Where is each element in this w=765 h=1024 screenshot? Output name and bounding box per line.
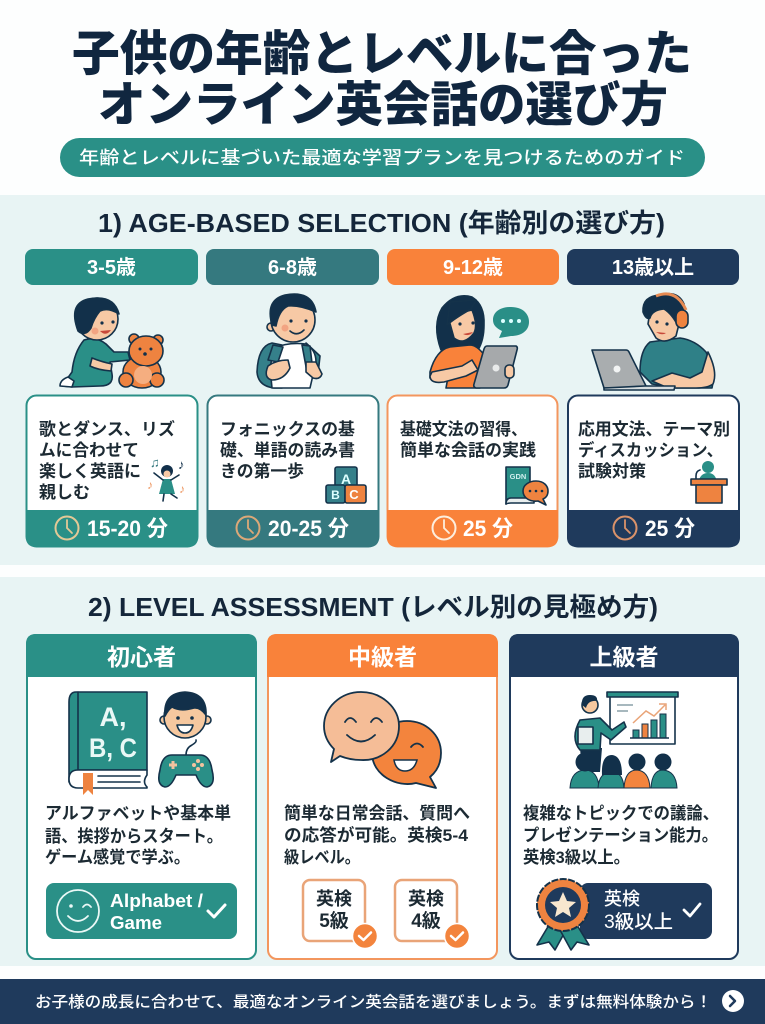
card text bbox=[578, 420, 730, 481]
subtitle pill bbox=[60, 138, 705, 177]
badge: Eiken grade 5: 5級 bbox=[319, 910, 349, 932]
level description: 英検3級以上。 bbox=[523, 847, 630, 867]
icon: ABC book bbox=[69, 692, 147, 795]
heading: level assessment: 2) LEVEL ASSESSMENT (レベル別の見極め方) bbox=[88, 592, 658, 622]
icon: dancing child: ♪ bbox=[147, 478, 153, 492]
icon: alphabet blocks: B bbox=[331, 488, 340, 502]
badge: alphabet / game bbox=[46, 883, 237, 939]
icon: dancing child: ♪ bbox=[179, 482, 185, 496]
icon: dancing child: ♫ bbox=[150, 455, 160, 470]
duration: 25 min: 25 分 bbox=[463, 516, 513, 541]
level description: ゲーム感覚で学ぶ。 bbox=[45, 847, 190, 867]
icon: book and chat: GDN bbox=[510, 472, 526, 481]
card: 9-12 years bbox=[387, 396, 558, 547]
badge: Eiken grade 3 and above: 3級以上 bbox=[604, 911, 673, 933]
card text bbox=[400, 420, 536, 460]
level title: 初心者 bbox=[107, 644, 176, 670]
tab: 13 and up bbox=[567, 249, 739, 285]
badge: Eiken grade 3 and above: 英検 bbox=[604, 889, 640, 909]
duration: 25 min bbox=[614, 516, 695, 541]
icon: smiling speech bubbles bbox=[324, 692, 441, 788]
icon: dancing child: ♪ bbox=[178, 457, 184, 472]
duration: 20-25 min bbox=[236, 516, 349, 541]
icon: alphabet blocks: A bbox=[341, 471, 351, 487]
card: 13 and up bbox=[567, 396, 740, 547]
icon: arrow button bbox=[722, 990, 744, 1012]
badge: Eiken grade 4 bbox=[395, 880, 470, 948]
duration: 25 min: 25 分 bbox=[645, 516, 695, 541]
badge: Eiken grade 3 and above bbox=[537, 879, 712, 950]
badge: Eiken grade 4: 英検 bbox=[408, 888, 444, 909]
icon: game controller bbox=[159, 740, 213, 787]
badge: Eiken grade 5 bbox=[303, 880, 378, 948]
level description: の応答が可能。英検5-4 bbox=[284, 825, 469, 845]
badge: Eiken grade 5: 英検 bbox=[316, 888, 352, 909]
panel: age-based selection bbox=[0, 195, 765, 565]
title: オンライン英会話の選び方 bbox=[98, 79, 668, 132]
title bbox=[72, 28, 692, 132]
tab: 3-5 years bbox=[25, 249, 198, 285]
card text: ムに合わせて bbox=[39, 441, 139, 460]
card: advanced bbox=[509, 634, 739, 959]
tab: 6-8 years bbox=[206, 249, 379, 285]
card text: 基礎文法の習得、 bbox=[400, 420, 527, 439]
level description: プレゼンテーション能力。 bbox=[523, 825, 718, 845]
badge: alphabet / game: Game bbox=[110, 913, 162, 933]
card: 6-8 years bbox=[207, 396, 379, 547]
level title: 上級者 bbox=[590, 644, 658, 670]
card text: ディスカッション、 bbox=[578, 440, 723, 460]
tab: 9-12 years: 9-12歳 bbox=[443, 256, 503, 279]
icon: alphabet blocks bbox=[326, 467, 366, 503]
icon: presenter with chart and audience bbox=[570, 692, 678, 788]
level description bbox=[523, 803, 719, 867]
level description: 語、挨拶からスタート。 bbox=[45, 826, 223, 846]
icon: teen with headphones and laptop bbox=[592, 294, 715, 390]
card text: 簡単な会話の実践 bbox=[400, 440, 536, 460]
icon: girl with tablet and speech bubble bbox=[430, 296, 529, 388]
tab: 13 and up: 13歳以上 bbox=[612, 256, 694, 279]
duration: 20-25 min: 20-25 分 bbox=[268, 516, 349, 541]
heading: age-based selection: 1) AGE-BASED SELECTION (年齢別の選び方) bbox=[98, 208, 665, 238]
card text: きの第一歩 bbox=[220, 461, 304, 481]
card text: フォニックスの基 bbox=[220, 420, 355, 439]
level description: アルファベットや基本単 bbox=[45, 804, 231, 823]
card text: 応用文法、テーマ別 bbox=[578, 420, 730, 439]
duration: 25 min bbox=[432, 516, 513, 541]
card: beginner bbox=[26, 634, 257, 959]
subtitle pill: 年齢とレベルに基づいた最適な学習プランを見つけるためのガイド bbox=[79, 148, 685, 168]
level title: 中級者 bbox=[348, 644, 417, 670]
card text: 試験対策 bbox=[578, 461, 646, 481]
icon: smiling child bbox=[160, 692, 211, 738]
tab: 6-8 years: 6-8歳 bbox=[268, 256, 317, 279]
card: 3-5 years bbox=[26, 396, 198, 547]
card text: 礎、単語の読み書 bbox=[220, 440, 355, 460]
panel: level assessment bbox=[0, 577, 765, 966]
tab: 9-12 years bbox=[387, 249, 559, 285]
duration: 15-20 min bbox=[56, 516, 168, 541]
tab: 3-5 years: 3-5歳 bbox=[87, 256, 136, 279]
icon: speaker at podium bbox=[691, 461, 727, 503]
level description bbox=[284, 803, 470, 867]
level description: 簡単な日常会話、質問へ bbox=[284, 803, 470, 823]
footer banner: お子様の成長に合わせて、最適なオンライン英会話を選びましょう。まずは無料体験から！ bbox=[35, 993, 712, 1011]
card text bbox=[220, 420, 355, 481]
icon: book and chat bbox=[506, 467, 548, 505]
icon: dancing child bbox=[147, 455, 185, 501]
icon: schoolchild with backpack bbox=[257, 294, 322, 388]
icon: alphabet blocks: C bbox=[349, 487, 359, 502]
card text: 親しむ bbox=[39, 483, 90, 502]
badge: alphabet / game: Alphabet / bbox=[110, 891, 203, 911]
card text: 楽しく英語に bbox=[39, 461, 141, 481]
title: 子供の年齢とレベルに合った bbox=[72, 28, 692, 81]
duration: 15-20 min: 15-20 分 bbox=[87, 516, 168, 541]
header bbox=[60, 28, 705, 177]
level description: 複雑なトピックでの議論、 bbox=[523, 803, 719, 823]
icon: ABC book: B, C bbox=[89, 733, 137, 763]
level description: 級レベル。 bbox=[284, 848, 360, 867]
footer banner bbox=[0, 979, 765, 1024]
card text bbox=[39, 419, 175, 502]
badge: Eiken grade 4: 4級 bbox=[411, 910, 441, 932]
card: intermediate bbox=[267, 634, 498, 959]
level description bbox=[45, 804, 231, 867]
card text: 歌とダンス、リズ bbox=[39, 419, 175, 439]
icon: child with teddy bear bbox=[60, 298, 164, 388]
icon: ABC book: A, bbox=[100, 702, 126, 732]
